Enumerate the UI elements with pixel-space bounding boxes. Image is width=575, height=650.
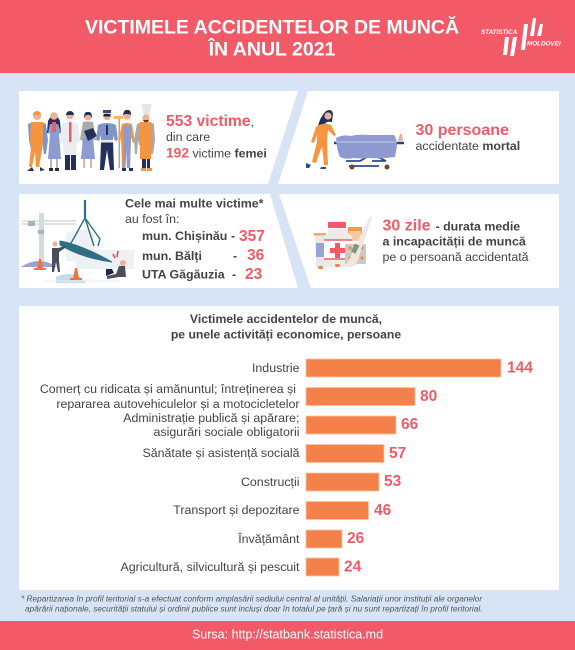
category labels: asigurări sociale obligatorii <box>153 425 300 439</box>
header banner <box>0 0 575 73</box>
category labels: Construcții <box>241 475 300 489</box>
title <box>85 16 459 60</box>
panel: regions with most victims <box>19 194 298 288</box>
bar values: 26 <box>347 530 365 547</box>
text: fatal victims: accidentate mortal <box>416 139 520 153</box>
text: regions list: 357 <box>239 228 265 245</box>
logo: Statistica Moldovei: STATISTICA <box>481 29 518 36</box>
fallen worker <box>106 251 126 279</box>
logo: Statistica Moldovei <box>481 18 561 56</box>
police officer <box>96 110 118 170</box>
title: ÎN ANUL 2021 <box>208 36 336 60</box>
text: total victims <box>166 113 267 160</box>
text: fatal victims: 30 persoane <box>416 122 509 139</box>
text: total victims: 553 victime, <box>166 113 254 130</box>
icon: medic with stretcher <box>306 110 404 170</box>
category labels <box>40 361 300 574</box>
loose pills <box>318 264 340 269</box>
text: regions list <box>125 196 265 283</box>
text: regions list: mun. Bălți <box>142 249 202 263</box>
panel: bar chart <box>19 306 559 590</box>
text: regions list: - <box>232 268 236 282</box>
text: regions list: UTA Găgăuzia <box>142 268 225 282</box>
text: total victims: din care <box>166 130 210 144</box>
category labels: Administrație publică și apărare; <box>123 411 300 425</box>
category labels: Industrie <box>252 361 300 375</box>
footer source: Sursa: http://statbank.statistica.md <box>192 628 383 642</box>
footer source <box>0 621 575 650</box>
stretcher <box>334 134 404 170</box>
painter woman <box>114 110 135 171</box>
text: total victims: 192 victime femei <box>166 146 267 160</box>
footnote <box>21 594 483 614</box>
bar values <box>344 360 533 576</box>
text: regions list: mun. Chișinău <box>142 229 227 243</box>
bar values: 66 <box>401 416 419 433</box>
bar values: 144 <box>507 360 533 376</box>
bar values: 80 <box>420 388 437 405</box>
hook and falling beam <box>60 200 112 262</box>
text: average incapacity <box>382 218 529 264</box>
bar values: 53 <box>384 473 402 490</box>
chef <box>134 103 155 171</box>
text: regions list: 36 <box>247 247 265 264</box>
logo: Statistica Moldovei: MOLDOVEI <box>527 40 561 48</box>
doctor <box>60 111 80 170</box>
chart title: Victimele accidentelor de muncă, <box>190 312 382 326</box>
bar values: 24 <box>344 558 362 576</box>
crane <box>22 213 76 261</box>
icon: construction accident <box>21 200 134 283</box>
builder <box>27 111 48 171</box>
bar values: 57 <box>389 445 406 462</box>
icon: medicine <box>314 216 372 269</box>
blister pack <box>345 244 366 264</box>
building <box>66 229 134 269</box>
text: average incapacity: 30 zile <box>382 218 431 234</box>
thermometer <box>347 216 372 267</box>
text: regions list: 23 <box>245 266 263 283</box>
ground mounds and cones <box>21 259 120 283</box>
footnote: * Repartizarea în profil teritorial s-a efectuat conform amplasării sediului central al unității. Salariații unor instituții ale organelor <box>21 594 483 604</box>
label strip <box>314 233 326 257</box>
category labels: Transport și depozitare <box>173 503 300 517</box>
standing worker <box>52 242 65 272</box>
pills in bottle <box>349 231 361 241</box>
panel: average incapacity <box>279 194 559 288</box>
medic <box>306 110 336 169</box>
chart title <box>171 312 401 342</box>
footnote: apărării naționale, securității statului și ordinii publice sunt incluși doar în totalul pe țară și nu sunt repartizați în profil teritorial. <box>25 604 482 614</box>
category labels: repararea autovehiculelor și a motocicletelor <box>56 397 300 411</box>
category labels: Comerț cu ridicata și amănuntul; întreținerea și <box>40 382 296 396</box>
text: average incapacity: a incapacității de muncă <box>382 234 526 248</box>
icon: group of workers <box>27 103 155 171</box>
panel: total victims <box>19 91 298 184</box>
panel: fatal victims <box>278 91 559 184</box>
orange bottle <box>348 227 362 237</box>
woman with folder <box>80 112 97 168</box>
title: VICTIMELE ACCIDENTELOR DE MUNCĂ <box>85 16 459 38</box>
text: fatal victims <box>416 122 520 153</box>
main bottle <box>324 222 352 267</box>
text: regions list: - <box>233 249 237 263</box>
text: regions list: au fost în: <box>125 212 179 226</box>
bars <box>306 359 501 576</box>
category labels: Învățământ <box>237 531 300 546</box>
chart title: pe unele activități economice, persoane <box>171 328 401 342</box>
text: regions list: Cele mai multe victime* <box>125 196 264 210</box>
small bottle <box>315 234 327 267</box>
text: average incapacity: pe o persoană accidentată <box>382 250 529 264</box>
category labels: Sănătate și asistență socială <box>142 446 300 460</box>
bar values: 46 <box>374 502 392 519</box>
woman in dress <box>47 112 61 171</box>
text: regions list: - <box>231 229 235 243</box>
text: average incapacity: - durata medie <box>436 220 520 234</box>
category labels: Agricultură, silvicultură și pescuit <box>120 560 300 574</box>
